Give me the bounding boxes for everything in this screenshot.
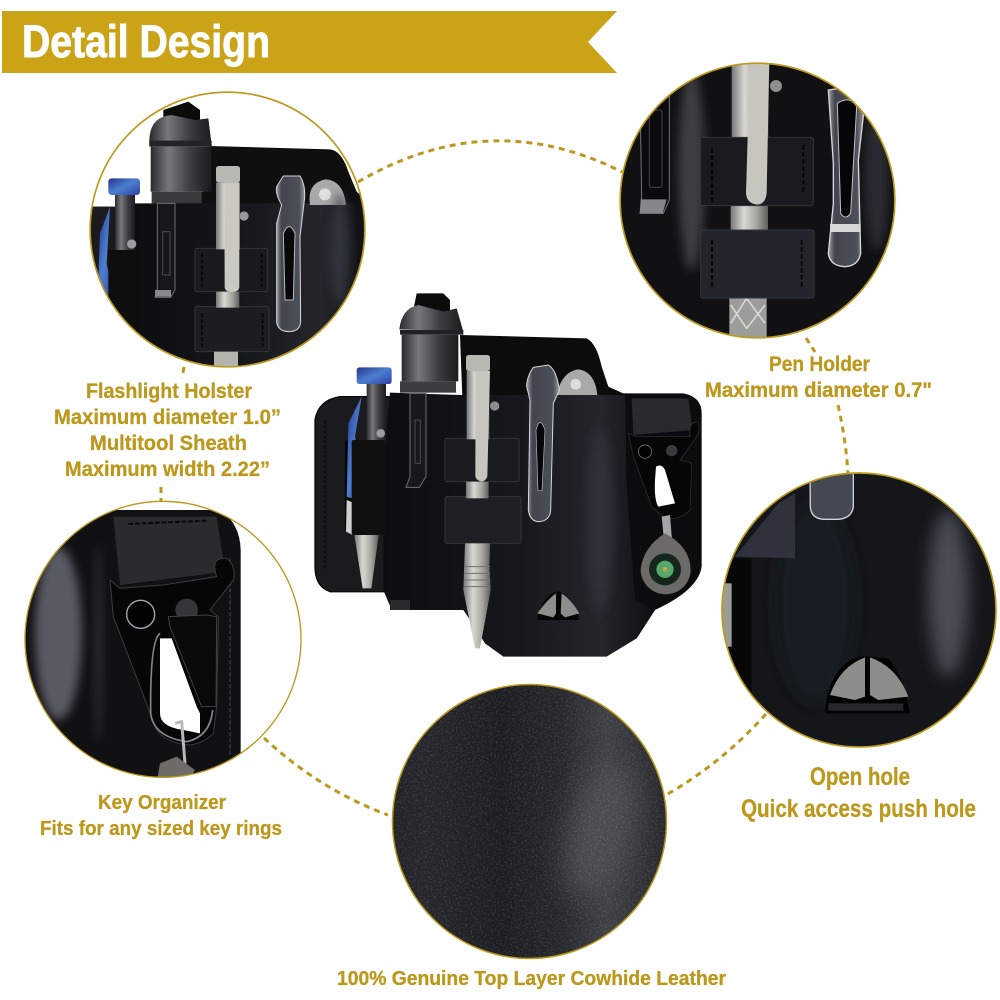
flashlight bbox=[413, 293, 450, 313]
label: flashlight holster: Maximum diameter 1.0” bbox=[54, 406, 281, 429]
leather loops bbox=[445, 438, 519, 482]
push hole bbox=[537, 592, 579, 620]
central product: leather sheath with tools bbox=[315, 293, 702, 657]
main pocket bbox=[383, 393, 655, 657]
right wing bbox=[620, 393, 702, 638]
left wing bbox=[315, 397, 393, 592]
panel: open hole detail circle bbox=[715, 470, 1000, 757]
label: key organizer bbox=[40, 792, 282, 840]
back panel bbox=[460, 335, 633, 513]
label: flashlight holster: Maximum width 2.22” bbox=[65, 458, 270, 481]
carabiner bbox=[628, 422, 699, 519]
label: flashlight holster bbox=[54, 380, 281, 481]
dashed connectors bbox=[161, 141, 848, 815]
compass bbox=[641, 533, 691, 594]
panel: flashlight and multitool detail circle bbox=[80, 90, 380, 373]
label: pen holder bbox=[705, 353, 932, 402]
titanium pen bbox=[466, 355, 490, 371]
title banner: Detail Design bbox=[22, 16, 270, 67]
label: open hole: Open hole bbox=[810, 763, 910, 791]
label: key organizer: Key Organizer bbox=[98, 792, 226, 814]
panel: key organizer detail circle bbox=[20, 500, 310, 790]
leather tab bbox=[632, 398, 693, 435]
title banner bbox=[2, 11, 617, 73]
label: leather: 100% Genuine Top Layer Cowhide Leather bbox=[337, 968, 726, 990]
label: open hole bbox=[741, 763, 976, 823]
pocket clip bbox=[527, 365, 559, 522]
panel: pen holder detail circle bbox=[619, 62, 896, 339]
label: pen holder: Maximum diameter 0.7" bbox=[705, 379, 932, 402]
label: pen holder: Pen Holder bbox=[769, 353, 870, 376]
label: flashlight holster: Flashlight Holster bbox=[86, 380, 252, 403]
multitool bbox=[557, 369, 597, 395]
multicolor pen bbox=[357, 367, 392, 384]
label: flashlight holster: Multitool Sheath bbox=[90, 432, 247, 455]
label: key organizer: Fits for any sized key rings bbox=[40, 818, 282, 840]
panel: cowhide leather detail circle bbox=[392, 684, 667, 959]
